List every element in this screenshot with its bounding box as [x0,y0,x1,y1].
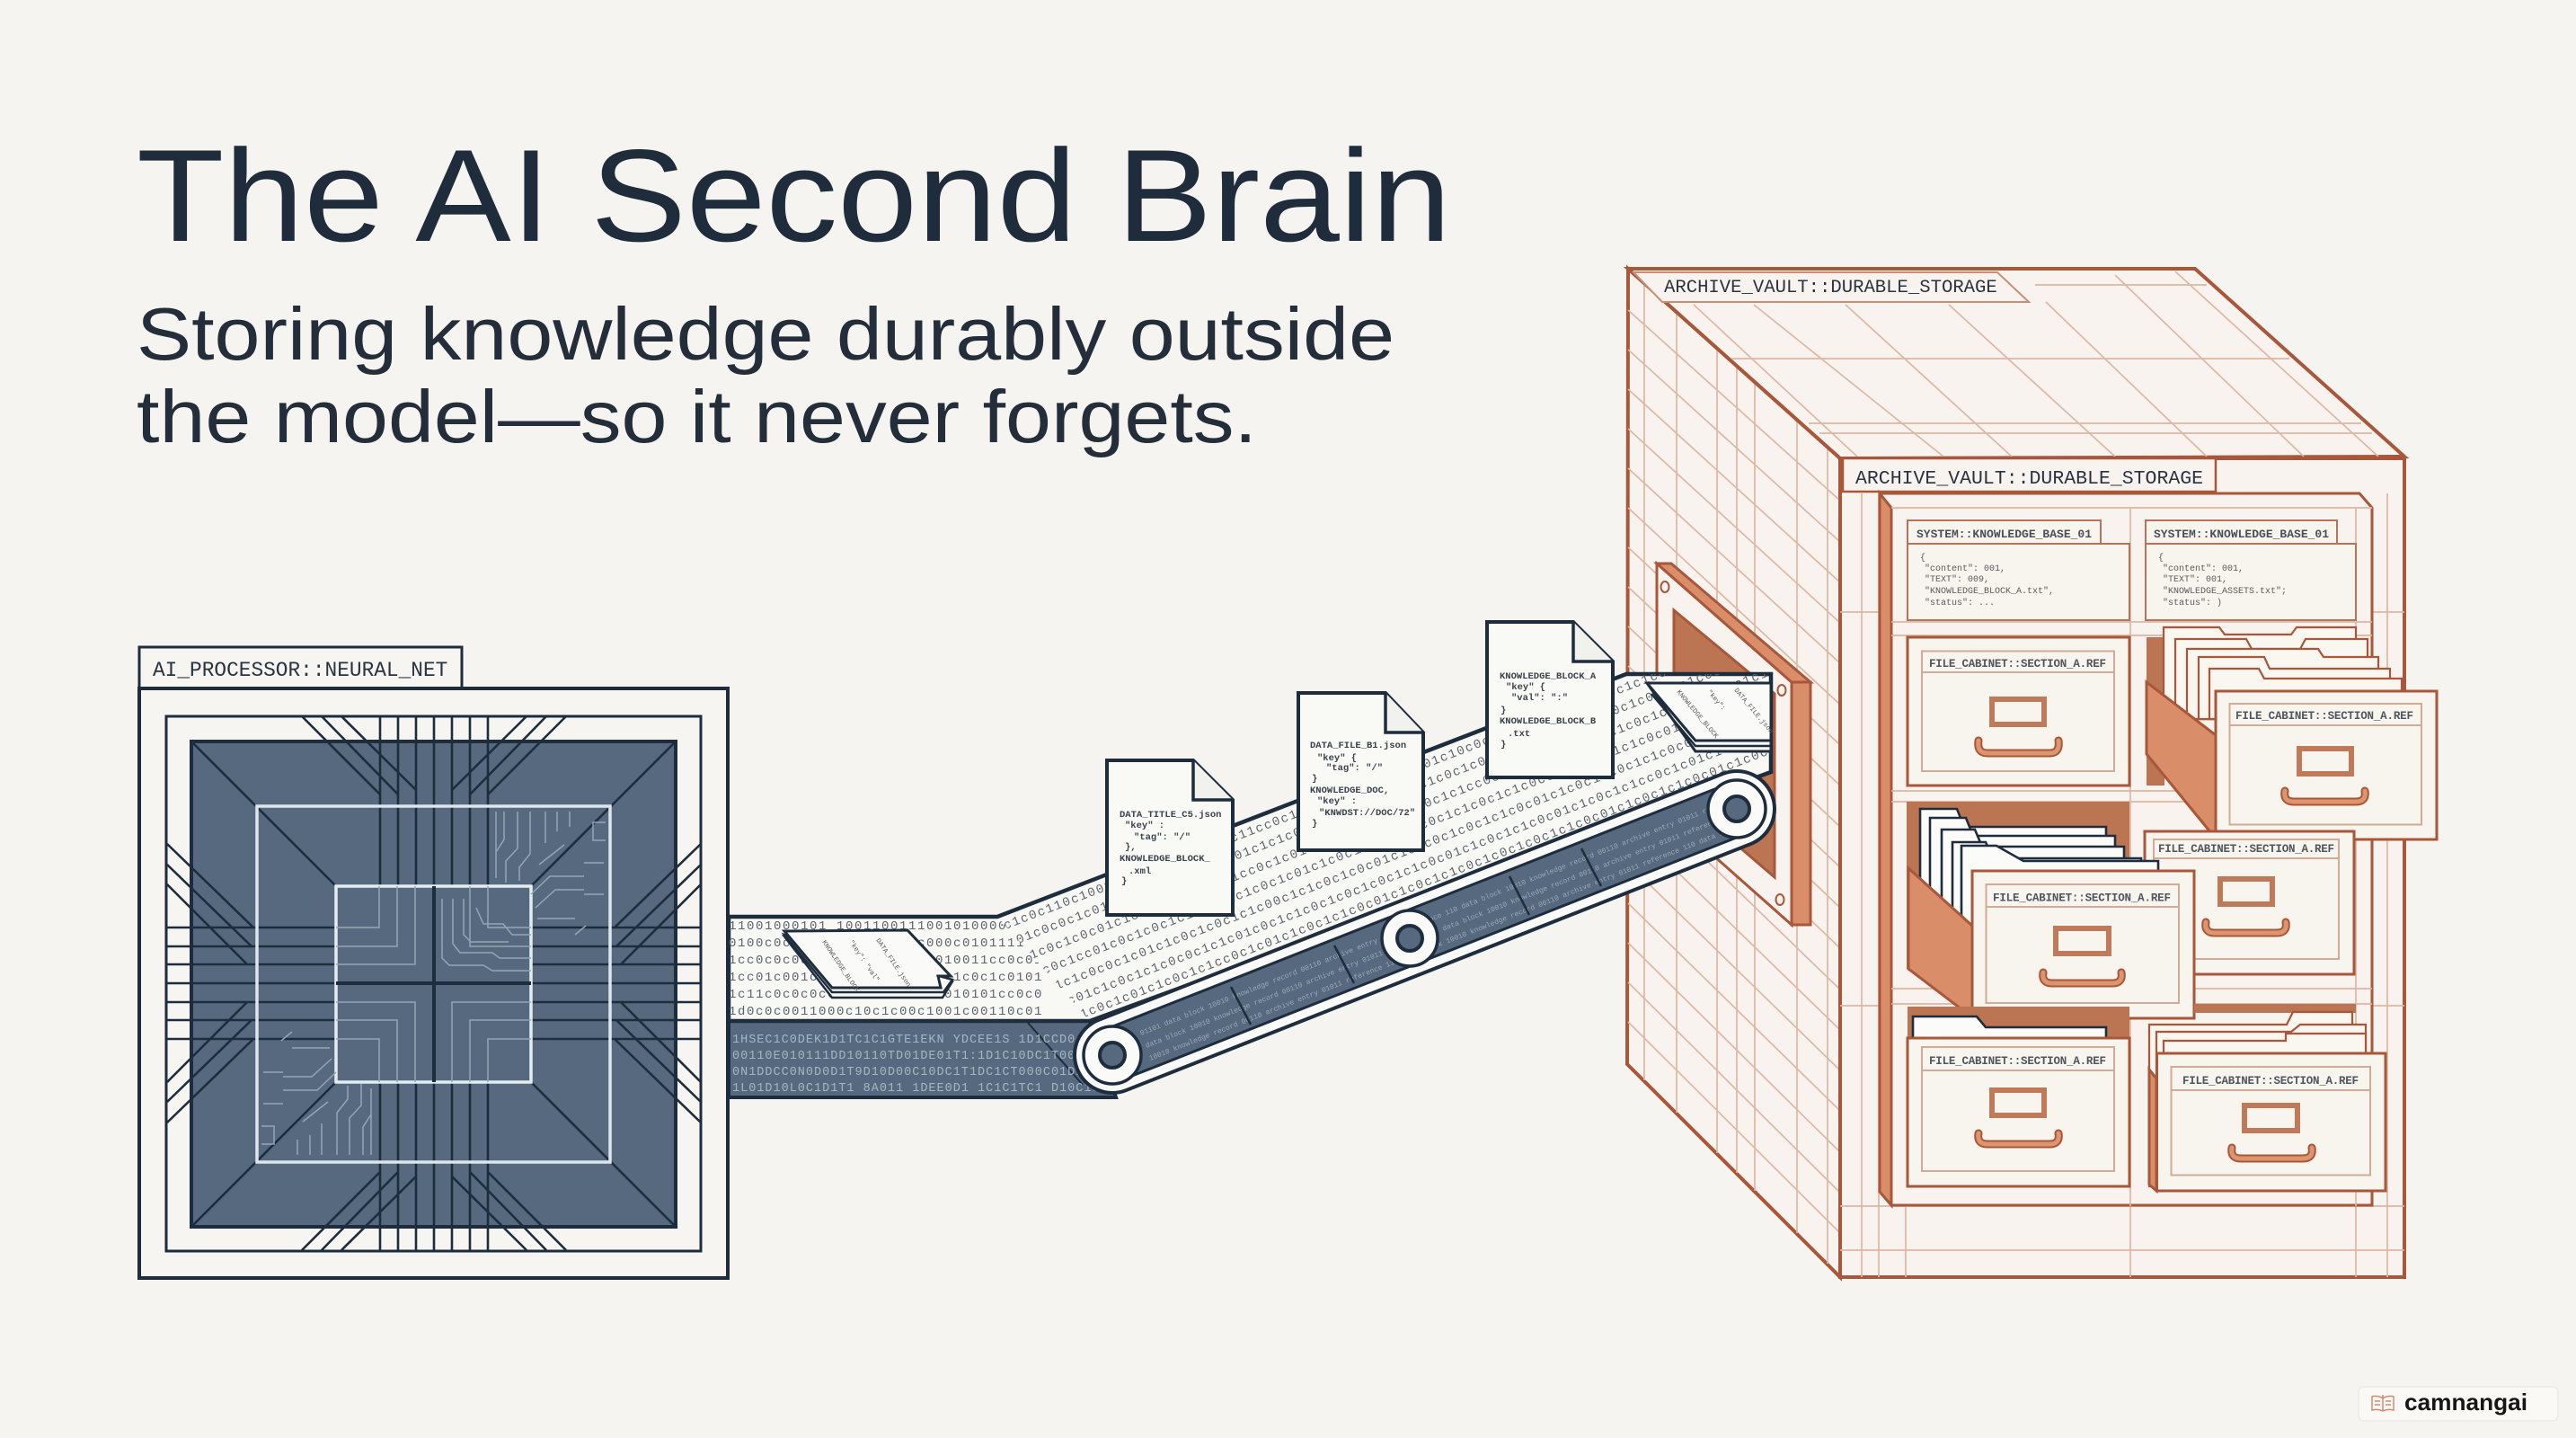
belt data rows flat: 1cc0c0c0000c0101c01cc01010011cc0c01 [729,954,1043,968]
panel: AI processor chip [139,647,728,1278]
belt data rows slanted: c1c0c110c1001c1cc01c0c01c10c11cc0c1c010c1c0c1c0c1c01c10c0c1c11c0c10c1c0c0c1c1c00c11c0c1c0c1c [1002,624,1779,934]
conveyor track: 01101 data block 10010 knowledge record 00110 archive entry 01011 reference 110 data block 10010 knowledge record 00110 archive entry 01011 reference 110 data 1001 block 0110 knowledge [1139,740,1881,1038]
center traces [336,886,531,1082]
flat document stack left: DATA_FILE.json [874,937,911,989]
die diagonals [191,741,676,1227]
document 2: "tag": "/" [1326,763,1383,774]
belt underside flat band: 1L01D10L0C1D1T1 8A011 1DEE0D1 1C1C1TC1 D10C1S010C1T01 [732,1082,1165,1096]
vault side wall [1627,269,1840,1277]
belt data rows flat [729,919,1043,1019]
drawer closed row 2 left: FILE_CABINET::SECTION_A.REF [1929,658,2106,670]
open drawer row 3 left: FILE_CABINET::SECTION_A.REF [1993,892,2171,904]
document 2: } [1312,819,1317,830]
vault side grid [1628,283,1840,1264]
vault top grid [1694,271,2378,457]
chip label tab: AI_PROCESSOR::NEURAL_NET [153,659,447,682]
document 1: DATA_TITLE_C5.json [1120,810,1221,821]
document 2: DATA_FILE_B1.json [1310,741,1406,751]
document 3: } [1500,706,1506,716]
drawer closed row 4 left: FILE_CABINET::SECTION_A.REF [1929,1055,2106,1068]
flat document stack right [1647,683,1774,751]
flat document stack left: "key": "val" [847,939,880,983]
front grid [1840,493,2404,1277]
panel: knowledge base left: SYSTEM::KNOWLEDGE_BASE_01 [1917,528,2092,541]
document 3: KNOWLEDGE_BLOCK_B [1500,716,1597,727]
chip die [191,741,676,1227]
cabinet shelves [1891,508,2372,1206]
top archive label [1633,272,2029,302]
drawer closed row 3 right [2145,831,2354,974]
panel: knowledge base right: "TEXT": 001, [2163,574,2227,585]
watermark badge [2359,1387,2558,1421]
panel: knowledge base right: "content": 001, [2163,564,2244,574]
document 1 [1107,760,1233,915]
panel: knowledge base left: "content": 001, [1925,564,2005,574]
panel: knowledge base right: { [2158,553,2164,564]
flat document stack right: KNOWLEDGE_BLOCK [1675,689,1720,741]
center square [336,886,531,1082]
circuit detail top right [496,812,606,935]
belt data rows flat: 1c11c0c0c0c00c01c011c0c0010101cc0c0 [729,988,1043,1002]
document 2: } [1312,774,1317,785]
subtitle: the model—so it never forgets. [137,375,1257,458]
roller middle [1382,910,1438,966]
belt underside flat band [730,1023,1119,1099]
chip label tab [139,647,462,688]
panel: knowledge base left: "TEXT": 009, [1925,574,1989,585]
circuit detail bottom left [261,1032,371,1155]
conveyor track: 10010 knowledge record 00110 archive entry 01011 reference 110 data block 10010 knowledge record 00110 archive entry 01011 reference 110 data 1001 block 0110 knowledge 001 record [1148,774,1865,1063]
flat document stack left: KNOWLEDGE_BLOCK [820,939,860,994]
belt underside flat band: 0N1DDCC0N0D0D1T9D10D00C10DC1T1DC1CT000C01D1C010T01T01 [732,1066,1165,1079]
vault intake slot [1657,564,1810,925]
belt data rows slanted: c01c1c0c1c1c0c0c1c1c01c0c1c1c0c1c0c1c0c1c1c0c01c1c0c1c1c0c01c1c0c1c1cc0c1c01c1c0c1c1c0c01c1c [1066,699,1843,1009]
panel: knowledge base right: "status": ) [2163,598,2222,608]
belt data rows flat: 11001000101 1001100111001010000111 [729,919,1034,934]
top archive label: ARCHIVE_VAULT::DURABLE_STORAGE [1664,278,1997,298]
open drawer row 4 right: FILE_CABINET::SECTION_A.REF [2182,1075,2359,1087]
document 2: KNOWLEDGE_DOC, [1310,786,1389,796]
flat document stack left [784,930,952,998]
roller right [1708,780,1766,838]
document 3: "val": ":" [1511,693,1568,704]
belt data rows slanted: 01c0c0c1c01c1c00c1c1c0c01c01c1c1c0c0c101c1c0c0c1c1c0c1c0c1cc0c01c1c1c0c0c1c01c1c1c0c01c1c0c [1014,642,1783,948]
middle square [257,806,610,1162]
belt data rows slanted: c0c1cc01c0c1c0c1c1c0c01c1c0c1c01c1c0c1c0c1c01c0c1c1c0c1c1c0c01c1cc0c1c1c0c01c1c0c1c1c0c01c1c [1040,669,1818,979]
drawer closed row 2 left [1908,637,2129,786]
document 1: KNOWLEDGE_BLOCK_ [1120,854,1211,865]
flat document stack right: DATA_FILE.json [1732,688,1774,735]
belt underside flat band: 00110E010111DD10110TD01DE01T1:1D1C10DC1T00T011C1T10S1 [732,1050,1165,1063]
conveyor track: data block 10010 knowledge record 00110 archive entry 01011 reference 110 data block 10010 knowledge record 00110 archive entry 01011 reference 110 data 1001 block 0110 knowledge 001 [1145,755,1878,1051]
open drawer row 2 right [2147,627,2437,839]
cabinet left strip [1880,493,1891,1205]
panel: knowledge base right [2146,520,2356,620]
vault slot and storage cabinet [1627,269,2437,1277]
front archive label: ARCHIVE_VAULT::DURABLE_STORAGE [1855,468,2203,490]
document 3: .txt [1508,729,1530,740]
belt data rows flat: 0100c0cc0111000c0c11cc000c010111101 [729,936,1043,951]
panel: knowledge base right: SYSTEM::KNOWLEDGE_BASE_01 [2154,528,2329,541]
document 1: "key" : [1125,821,1164,831]
belt data rows slanted: 1c1c0c0c1c01c1c0c1c0c1c1c00c1c1c0c1c0c01c1c1c0c1c0c1c1c0c01c1c0c1cc0c1c1c0c01c1c0c1c1c0c01c1 [1053,684,1830,994]
document 3: } [1500,740,1506,750]
document 1: }, [1125,842,1137,853]
open drawer row 4 right [2149,1004,2386,1191]
icon: open book [2372,1395,2394,1411]
drawer closed row 3 right: FILE_CABINET::SECTION_A.REF [2158,843,2334,856]
open drawer row 3 left [1907,802,2194,1018]
chip inner frame [166,716,701,1251]
subtitle [137,292,1394,458]
document 1: } [1121,876,1127,887]
panel: knowledge base left [1908,520,2129,620]
title: The AI Second Brain [137,122,1451,269]
document 2 [1298,693,1423,850]
cabinet interior [1880,493,2372,1205]
panel: knowledge base left: { [1920,553,1925,564]
belt data rows flat: 1d0c0c0011000c10c1c00c1001c00110c01 [729,1005,1043,1019]
document 2: "key" : [1317,796,1357,807]
document 1: .xml [1129,866,1151,877]
open drawer row 2 right: FILE_CABINET::SECTION_A.REF [2235,710,2413,723]
conveyor belt [730,644,1776,1099]
belt data rows slanted: 1c0c1c01c1c0c1c1cc0c1c01c1c0c1c1c0c01c1c0c1c1c0c1c0c1c0c1c1c0c01c1c0c1c1c0c01c1c0c1c1cc0c1c0 [1078,713,1855,1023]
document 3: KNOWLEDGE_BLOCK_A [1500,671,1597,682]
chip outer frame [139,688,728,1278]
vault front face [1840,458,2404,1277]
watermark badge: camnangai [2404,1389,2527,1416]
front archive label [1843,458,2216,492]
panel: knowledge base left: "status": ... [1925,598,1995,608]
document 2: "key" { [1317,753,1357,764]
panel: knowledge base right: "KNOWLEDGE_ASSETS.txt"; [2163,586,2287,597]
roller left [1084,1026,1141,1084]
belt top surface [729,674,1771,1021]
document 2: "KNWDST://DOC/72" [1319,808,1415,819]
vault top face [1628,269,2404,458]
document 3: "key" { [1506,682,1545,693]
document 1: "tag": "/" [1134,832,1191,843]
belt data rows slanted: 1c0c1c0c01c1c0c10c1c0c0c1cc0c1c01c0c1c1c0c1c01c0c1c1cc0c1c01c0c1c1c00c1c0c1c0c01c1c0c1c1c0c1 [1028,653,1805,963]
belt data rows flat: 1cc01c001c011c00101c0c0011c0c1c0101 [729,971,1043,985]
subtitle: Storing knowledge durably outside [137,292,1394,376]
flat document stack right: "key": [1705,689,1726,713]
drawer closed row 4 left [1908,1007,2129,1186]
document 3 [1487,622,1613,777]
panel: knowledge base left: "KNOWLEDGE_BLOCK_A.txt", [1925,586,2054,597]
belt underside flat band: 1HSEC1C0DEK1D1TC1C1GTE1EKN YDCEE1S 1D1CCD0ODOT1LT1DE [732,1034,1157,1047]
traces top-left and mirrored [167,716,701,1250]
